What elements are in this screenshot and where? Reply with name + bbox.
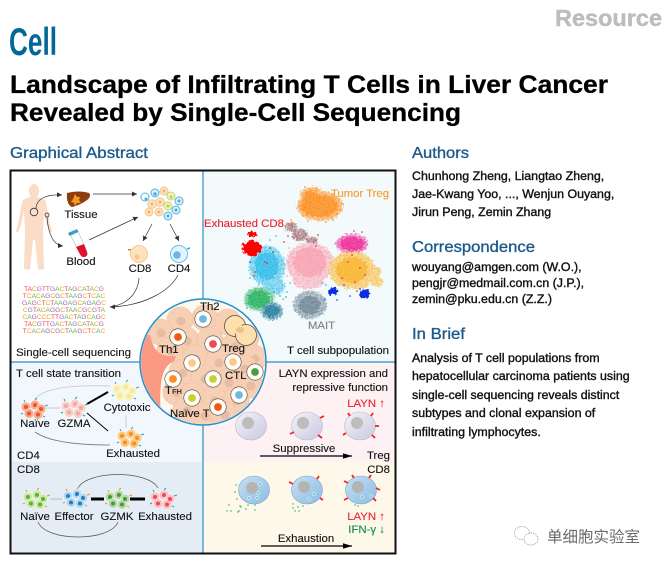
label: IFN-gamma down: IFN-γ ↓ — [348, 524, 385, 536]
label: Blood: Blood — [66, 256, 96, 268]
section: In Brief: Analysis of T cell populations from — [412, 351, 600, 365]
arrow: exhaustion — [261, 545, 352, 547]
section: Correspondence: wouyang@amgen.com (W.O.), — [411, 260, 582, 274]
CD8 cell labels: Naïve — [20, 511, 50, 523]
label: CD4: CD4 — [168, 263, 190, 275]
watermark — [514, 525, 640, 547]
cell labels — [159, 301, 247, 420]
CD4 transition links — [35, 386, 126, 445]
section: In Brief: subtypes and clonal expansion of — [412, 406, 596, 420]
sequence reads: TCACAGCGCTAAGCTCAC — [23, 328, 105, 335]
label: Resource: Resource — [555, 5, 662, 31]
cell labels: Th2 — [200, 301, 220, 313]
label: Treg: Treg — [367, 450, 390, 462]
icon: human body — [16, 184, 63, 270]
panel: LAYN expression and repressive function — [227, 368, 390, 546]
section: In Brief — [412, 326, 630, 439]
icon: chat bubbles — [514, 526, 538, 545]
title: Revealed by Single-Cell Sequencing — [10, 99, 461, 127]
label: MAIT: MAIT — [308, 320, 335, 332]
label: CD8: CD8 — [367, 464, 390, 476]
label: Suppressive: Suppressive — [273, 443, 335, 455]
sequence reads: TACGTTGACTAGCATACG — [24, 321, 104, 328]
section: In Brief: hepatocellular carcinoma patients using — [412, 369, 630, 383]
label: Tumor Treg: Tumor Treg — [331, 188, 389, 200]
T cells — [165, 311, 263, 415]
title — [10, 71, 608, 127]
panel backgrounds — [10, 170, 396, 554]
section: Authors: Jirun Peng, Zemin Zhang — [412, 205, 551, 219]
label: Tissue: Tissue — [64, 209, 98, 221]
arrows: cells to sequences — [110, 275, 178, 307]
watermark text: 单细胞实验室 — [547, 525, 640, 547]
section: Authors: Chunhong Zheng, Liangtao Zheng, — [412, 169, 604, 183]
title: Landscape of Infiltrating T Cells in Liver Cancer — [10, 71, 608, 99]
heading: Graphical Abstract: Graphical Abstract — [10, 145, 149, 162]
section: In Brief: In Brief — [412, 326, 466, 343]
CD4 cell labels — [17, 402, 160, 476]
section: Correspondence: zemin@pku.edu.cn (Z.Z.) — [412, 292, 552, 306]
CD4 cell clusters — [21, 380, 144, 448]
panel: T cell state transition — [16, 368, 192, 537]
CD4 cell labels: Cytotoxic — [104, 402, 151, 414]
sequence reads: TACGTTGACTAGCATACG — [24, 286, 104, 293]
icon: liver — [67, 192, 90, 207]
CD4 cell labels: CD4 — [17, 450, 40, 462]
label: LAYN up (CD8): LAYN ↑ — [347, 511, 385, 523]
section: Authors: Jae-Kwang Yoo, ..., Wenjun Ouyang, — [412, 187, 614, 201]
CD8 transition links — [38, 474, 158, 537]
CD8 cell labels: Effector — [54, 511, 94, 523]
icon: blood tube — [68, 229, 87, 257]
icon: sorted cell cluster — [141, 187, 183, 220]
cell labels: Naïve T — [170, 408, 210, 420]
cell labels: TFH — [165, 385, 182, 397]
dividing Treg cell — [224, 316, 256, 346]
label: LAYN up (Treg): LAYN ↑ — [347, 398, 385, 410]
arrow: suppressive — [260, 455, 352, 457]
heading: LAYN expression — [279, 368, 388, 394]
section: Correspondence: pengjr@medmail.com.cn (J.P.), — [412, 276, 584, 290]
icon: CD8 cell — [128, 246, 148, 262]
sequence reads — [22, 286, 106, 335]
CD8 cell clusters — [23, 487, 177, 509]
Treg cells — [236, 412, 379, 440]
section: In Brief: single-cell sequencing reveals distinct — [412, 388, 620, 402]
panel: single-cell sequencing — [16, 184, 190, 359]
sequence reads: CAGCCCTTGACTAGCAGC — [22, 314, 106, 321]
label: CD8: CD8 — [129, 263, 151, 275]
section: In Brief: infiltrating lymphocytes. — [412, 425, 541, 439]
section: Authors — [412, 145, 614, 219]
label: T cell state transition: T cell state transition — [16, 368, 121, 380]
arrows: sampling to cells — [89, 194, 179, 241]
cell labels: Treg — [222, 343, 245, 355]
icon: CD4 cell — [170, 246, 190, 262]
section: Correspondence: Correspondence — [412, 239, 535, 256]
section: Authors: Authors — [412, 145, 469, 162]
cell labels: Th1 — [159, 344, 179, 356]
sequence reads: TCACAGCGCTAAGCTCAC — [23, 293, 105, 300]
central tumour circle — [135, 299, 267, 428]
CD4 cell labels: Naïve — [20, 418, 50, 430]
t-SNE scatter plot — [242, 187, 383, 320]
journal logo: Cell: Cell — [9, 21, 57, 64]
CD4 cell labels: GZMA — [58, 418, 91, 430]
CD8 cell labels: Exhausted — [138, 511, 192, 523]
heading: LAYN expression: repressive function — [292, 382, 388, 394]
CD8 cell labels: GZMK — [101, 511, 134, 523]
sequence reads: GAGCTCTAAGAGCAGAGC — [22, 300, 106, 307]
sequence reads: CGTACAGGCTAACGCGTA — [23, 307, 106, 314]
panel: T cell subpopulation — [204, 187, 389, 357]
blood vessel — [141, 335, 176, 407]
label: T cell subpopulation: T cell subpopulation — [287, 345, 389, 357]
cell labels: CTL — [225, 370, 247, 382]
label: Single-cell sequencing: Single-cell sequencing — [16, 347, 131, 359]
CD8 cell labels — [20, 511, 192, 523]
CD4 cell labels: CD8 — [17, 464, 40, 476]
label: Exhausted CD8: Exhausted CD8 — [204, 218, 284, 230]
label: Exhaustion: Exhaustion — [278, 533, 334, 545]
heading: LAYN expression: LAYN expression and — [279, 368, 388, 380]
graphical abstract panel — [10, 170, 396, 554]
IFN-gamma dots — [227, 485, 358, 512]
CD4 cell labels: Exhausted — [106, 448, 160, 460]
CD8 exhausted cells — [238, 475, 380, 504]
tumour cell mass — [135, 305, 267, 428]
section: Correspondence — [411, 239, 584, 306]
